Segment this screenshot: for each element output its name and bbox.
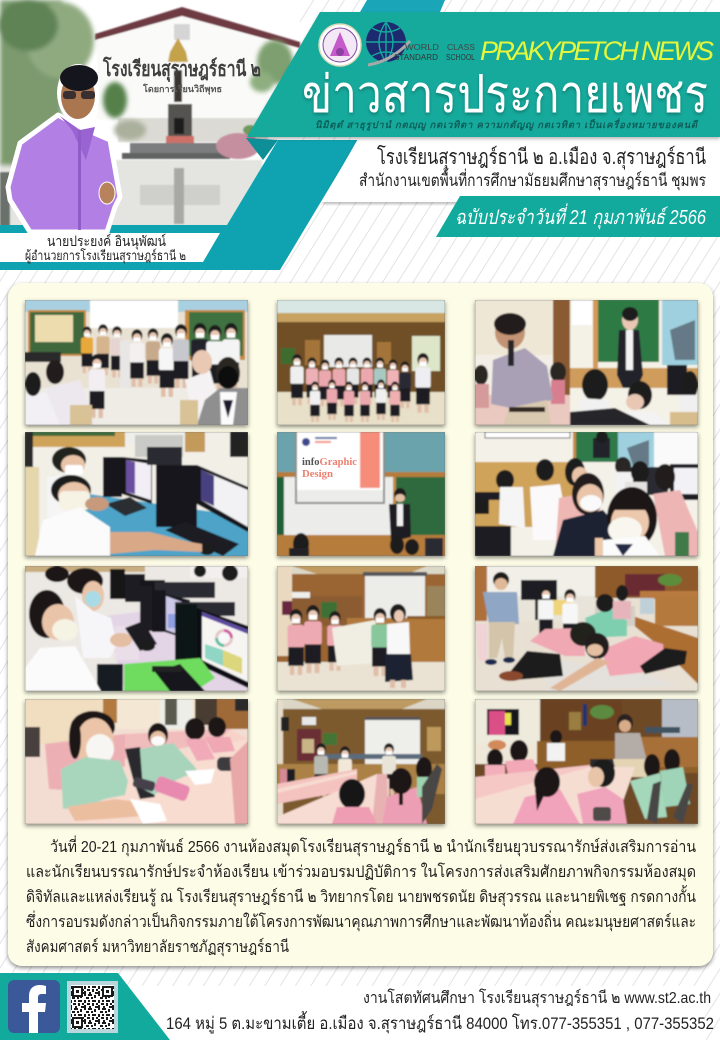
photo: students in lab smiling: [475, 432, 698, 556]
photo: meeting room lecture: [277, 699, 445, 824]
slide text: infoGraphic: [302, 456, 357, 468]
photo: girl at color wheel screen: [25, 566, 248, 691]
date banner: [436, 196, 720, 237]
motto: นิมิตฺตํ สาธุรูปานํ กตญฺญู กตเวทิตา ความกตัญญู กตเวทิตา เป็นเครื่องหมายของคนดี: [315, 118, 699, 131]
article paragraph: สังคมศาสตร์ มหาวิทยาลัยราชภัฏสุราษฎร์ธานี: [26, 937, 289, 957]
photo: students working on floor: [475, 566, 698, 691]
school motto sign: โดยการเรียนวิถีพุทธ: [142, 83, 222, 95]
photo: speakers composite: [475, 300, 698, 425]
purple shirt: [8, 115, 120, 232]
photo: boy at computer: [25, 432, 248, 556]
head: [57, 64, 99, 122]
world-class globe logo: [366, 22, 475, 65]
photo: girls at pink table: [25, 699, 248, 824]
slide text: Design: [302, 468, 333, 480]
world-class globe logo: SCHOOL: [446, 53, 475, 62]
header teal banner: [246, 0, 720, 237]
emblem logo: [319, 24, 361, 66]
article paragraph: [26, 835, 696, 957]
photo: infographic design slide: [277, 432, 445, 556]
blue diagonal band: [0, 140, 358, 270]
school sign text: โรงเรียนสุราษฎร์ธานี ๒: [102, 56, 261, 83]
photo: students with poster: [277, 566, 445, 691]
photo shadows: [25, 300, 698, 824]
footer: [0, 973, 714, 1040]
photo: group in meeting hall: [277, 300, 445, 425]
white subheader block: [322, 137, 720, 202]
main teal panel: [247, 12, 720, 137]
thumbs up hand: [99, 182, 115, 204]
name plate: นายประยงค์ อินนุพัฒน์: [47, 233, 166, 250]
name plate: ผู้อำนวยการโรงเรียนสุราษฎร์ธานี ๒: [25, 248, 186, 264]
slide text: [302, 456, 357, 480]
world-class globe logo: STANDARD: [394, 52, 438, 62]
world-class globe logo: CLASS: [447, 42, 475, 52]
school building photo: [0, 0, 300, 232]
upper accent strip: [360, 0, 445, 12]
footer teal corner: [0, 973, 170, 1040]
dark fold triangle: [246, 138, 278, 160]
photo: group in computer lab: [25, 300, 248, 425]
name plate: [0, 233, 220, 264]
director portrait: [8, 64, 120, 232]
icon: QR code: [67, 981, 118, 1033]
world-class globe logo: WORLD: [405, 42, 439, 52]
content panel: [8, 283, 713, 966]
english title: PRAKYPETCH NEWS: [480, 36, 714, 66]
icon: facebook: [8, 980, 60, 1033]
photo: group discussion: [475, 699, 698, 824]
photo grid: [25, 300, 698, 824]
